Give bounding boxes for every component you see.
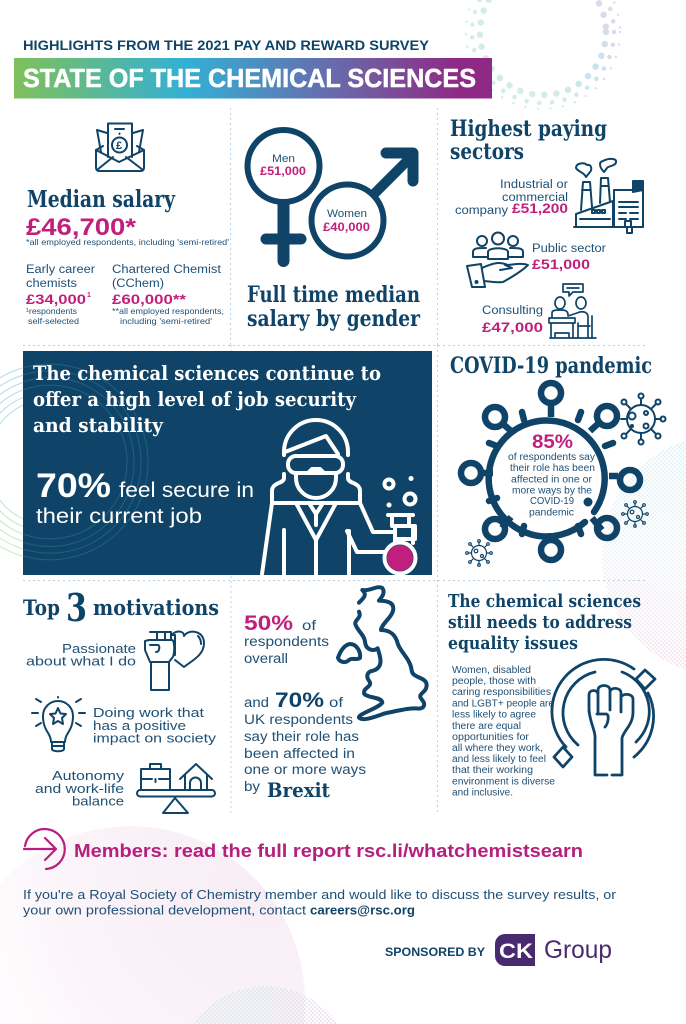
- panel: highest paying sectors: £51,000: [532, 256, 590, 272]
- panel: covid-19 pandemic: their role has been: [510, 463, 595, 474]
- sponsor: [385, 934, 612, 966]
- chartered chemist: £60,000**: [112, 291, 187, 307]
- icon: consulting at desk: [549, 284, 596, 338]
- icon: large virus: [461, 383, 640, 560]
- panel: brexit: UK respondents: [244, 712, 353, 727]
- panel: median salary: Median salary: [27, 186, 176, 213]
- panel: highest paying sectors: Public sector: [532, 243, 606, 255]
- title banner: STATE OF THE CHEMICAL SCIENCES: [23, 65, 476, 93]
- panel: salary by gender: £51,000: [260, 166, 306, 178]
- icon: small virus lower right: [622, 501, 648, 527]
- contact text: careers@rsc.org: [310, 902, 415, 918]
- panel: top 3 motivations: Doing work that: [93, 705, 204, 720]
- chartered chemist: [112, 264, 224, 326]
- icon: small virus lower left: [466, 540, 492, 566]
- panel: salary by gender: £40,000: [323, 222, 370, 234]
- early career chemists: self-selected: [28, 316, 79, 326]
- background: dotted ring top right: [466, 0, 620, 109]
- panel: top 3 motivations: [23, 585, 219, 813]
- panel: job security: 70%: [36, 467, 111, 505]
- panel: brexit: say their role has: [244, 729, 359, 744]
- equality body text: people, those with: [452, 676, 536, 687]
- equality body text: there are equal: [452, 721, 521, 732]
- panel: top 3 motivations: Top: [23, 595, 60, 620]
- panel: top 3 motivations: about what I do: [26, 654, 136, 668]
- panel overlay arcs: [23, 364, 148, 560]
- panel: brexit: respondents: [244, 634, 329, 649]
- header: survey highlights: HIGHLIGHTS FROM THE 2021 PAY AND REWARD SURVEY: [23, 38, 429, 53]
- contact text: [23, 887, 617, 918]
- panel: salary by gender: Men: [272, 153, 295, 165]
- panel: salary by gender: salary by gender: [247, 306, 420, 332]
- panel: highest paying sectors: company: [455, 205, 508, 217]
- chartered chemist: (CChem): [112, 278, 164, 290]
- panel: job security: their current job: [36, 505, 202, 528]
- panel: salary by gender: Women: [327, 208, 367, 220]
- panel: job security: offer a high level of job security: [33, 387, 357, 411]
- icon: map of UK and Ireland: [338, 587, 427, 719]
- equality body text: and less likely to feel: [452, 754, 546, 765]
- background: halftone half circle: [193, 986, 338, 1024]
- equality body text: and inclusive.: [452, 788, 513, 798]
- panel: job security: feel secure in: [119, 479, 254, 502]
- icon: female symbol: [248, 130, 320, 261]
- chartered chemist: including 'semi-retired': [120, 316, 212, 326]
- panel: equality issues: equality issues: [448, 633, 578, 654]
- panel: salary by gender: [247, 130, 420, 332]
- panel: brexit: 50%: [244, 612, 293, 635]
- icon: raised fist in circle: [552, 659, 655, 775]
- panel: highest paying sectors: Consulting: [482, 305, 543, 317]
- equality body text: Women, disabled: [452, 665, 531, 676]
- panel: brexit: one or more ways: [244, 762, 366, 777]
- panel: brexit: and: [244, 695, 269, 710]
- panel: brexit: by: [244, 779, 260, 794]
- panel: job security: [23, 351, 432, 575]
- panel: median salary: [26, 124, 229, 326]
- panel: covid-19 pandemic: 85%: [532, 432, 573, 453]
- panel: highest paying sectors: commercial: [502, 192, 568, 204]
- panel: top 3 motivations: impact on society: [93, 730, 217, 746]
- panel: top 3 motivations: and work-life: [35, 781, 124, 796]
- background: concentric arcs beside panel: [0, 364, 148, 560]
- equality body text: less likely to agree: [452, 710, 536, 720]
- equality body text: [452, 665, 555, 798]
- panel: brexit: overall: [244, 651, 288, 666]
- panel: covid-19 pandemic: pandemic: [529, 508, 574, 518]
- early career chemists: [26, 264, 95, 326]
- panel: covid-19 pandemic: affected in one or: [511, 474, 593, 486]
- panel: highest paying sectors: Industrial or: [500, 179, 568, 191]
- icon: small virus upper right: [621, 394, 666, 444]
- title banner: [14, 58, 492, 98]
- panel: top 3 motivations: motivations: [93, 595, 219, 620]
- contact text: your own professional development, contact: [23, 902, 306, 918]
- panel: job security: The chemical sciences continue to: [33, 361, 381, 385]
- panel: salary by gender: Full time median: [247, 282, 420, 308]
- icon: envelope with banknotes: £: [116, 140, 122, 152]
- panel: equality issues: The chemical sciences: [448, 591, 641, 612]
- panel: top 3 motivations: Passionate: [62, 641, 136, 656]
- icon: fist and heart: [145, 632, 204, 690]
- panel: median salary: *all employed respondents, including 'semi-retired': [26, 237, 229, 247]
- logo: CK Group: CK: [499, 940, 533, 963]
- panel: highest paying sectors: [450, 116, 643, 338]
- panel: covid-19 pandemic: more ways by the: [512, 486, 592, 496]
- panel: top 3 motivations: Autonomy: [52, 768, 125, 783]
- early career chemists: Early career: [26, 264, 95, 276]
- panel: highest paying sectors: £51,200: [512, 200, 568, 216]
- icon: people on open hand: [467, 232, 528, 287]
- dividers: [23, 108, 645, 815]
- sponsor: SPONSORED BY: [385, 945, 485, 959]
- icon: lightbulb with star: [32, 697, 85, 751]
- panel: top 3 motivations: balance: [72, 794, 124, 808]
- early career chemists: £34,000: [26, 291, 86, 307]
- panel: brexit: been affected in: [244, 746, 355, 761]
- panel: brexit: of: [302, 618, 316, 633]
- early career chemists: chemists: [26, 278, 77, 290]
- panel: equality issues: [448, 591, 655, 798]
- equality body text: environment is diverse: [452, 776, 555, 788]
- chartered chemist: Chartered Chemist: [112, 264, 222, 276]
- logo: CK Group: [495, 934, 612, 966]
- early career chemists: ¹respondents: [26, 306, 77, 316]
- panel: job security: and stability: [33, 413, 164, 437]
- icon: scientist with flask: [262, 420, 416, 574]
- call to action: [24, 829, 583, 869]
- panel: covid-19 pandemic: [450, 353, 666, 566]
- logo: CK Group: Group: [544, 936, 612, 964]
- panel: brexit: Brexit: [267, 778, 331, 802]
- equality body text: and LGBT+ people are: [452, 698, 554, 710]
- early career chemists: 1: [87, 292, 91, 299]
- chartered chemist: **all employed respondents,: [112, 306, 224, 316]
- panel: brexit: of: [329, 695, 343, 710]
- panel: highest paying sectors: Highest paying: [450, 116, 607, 142]
- panel: covid-19 pandemic: COVID-19: [530, 496, 574, 507]
- panel: top 3 motivations: 3: [66, 585, 87, 630]
- icon: male symbol: [312, 153, 413, 256]
- panel: brexit: [244, 587, 427, 802]
- panel: covid-19 pandemic: of respondents say: [508, 452, 595, 463]
- background: halftone blob right: [602, 440, 686, 670]
- icon: envelope with banknotes: [96, 124, 144, 171]
- equality body text: that their working: [452, 765, 533, 776]
- background: pink circle: [0, 826, 305, 1024]
- icon: work-life balance scale: [137, 764, 215, 813]
- icon: factory: [574, 159, 643, 233]
- equality body text: opportunities for: [452, 732, 530, 743]
- contact text: If you're a Royal Society of Chemistry member and would like to discuss the survey results, or: [23, 887, 617, 902]
- panel: highest paying sectors: £47,000: [482, 319, 543, 335]
- panel: highest paying sectors: sectors: [450, 139, 524, 165]
- panel: equality issues: still needs to address: [448, 612, 632, 633]
- equality body text: caring responsibilities: [452, 687, 551, 698]
- icon: arrow in circle: [24, 829, 65, 869]
- panel: median salary: £46,700*: [26, 214, 137, 241]
- panel: brexit: 70%: [275, 689, 324, 712]
- panel: top 3 motivations: has a positive: [93, 718, 186, 733]
- call to action: Members: read the full report rsc.li/whatchemistsearn: [74, 840, 583, 861]
- equality body text: all where they work,: [452, 743, 543, 754]
